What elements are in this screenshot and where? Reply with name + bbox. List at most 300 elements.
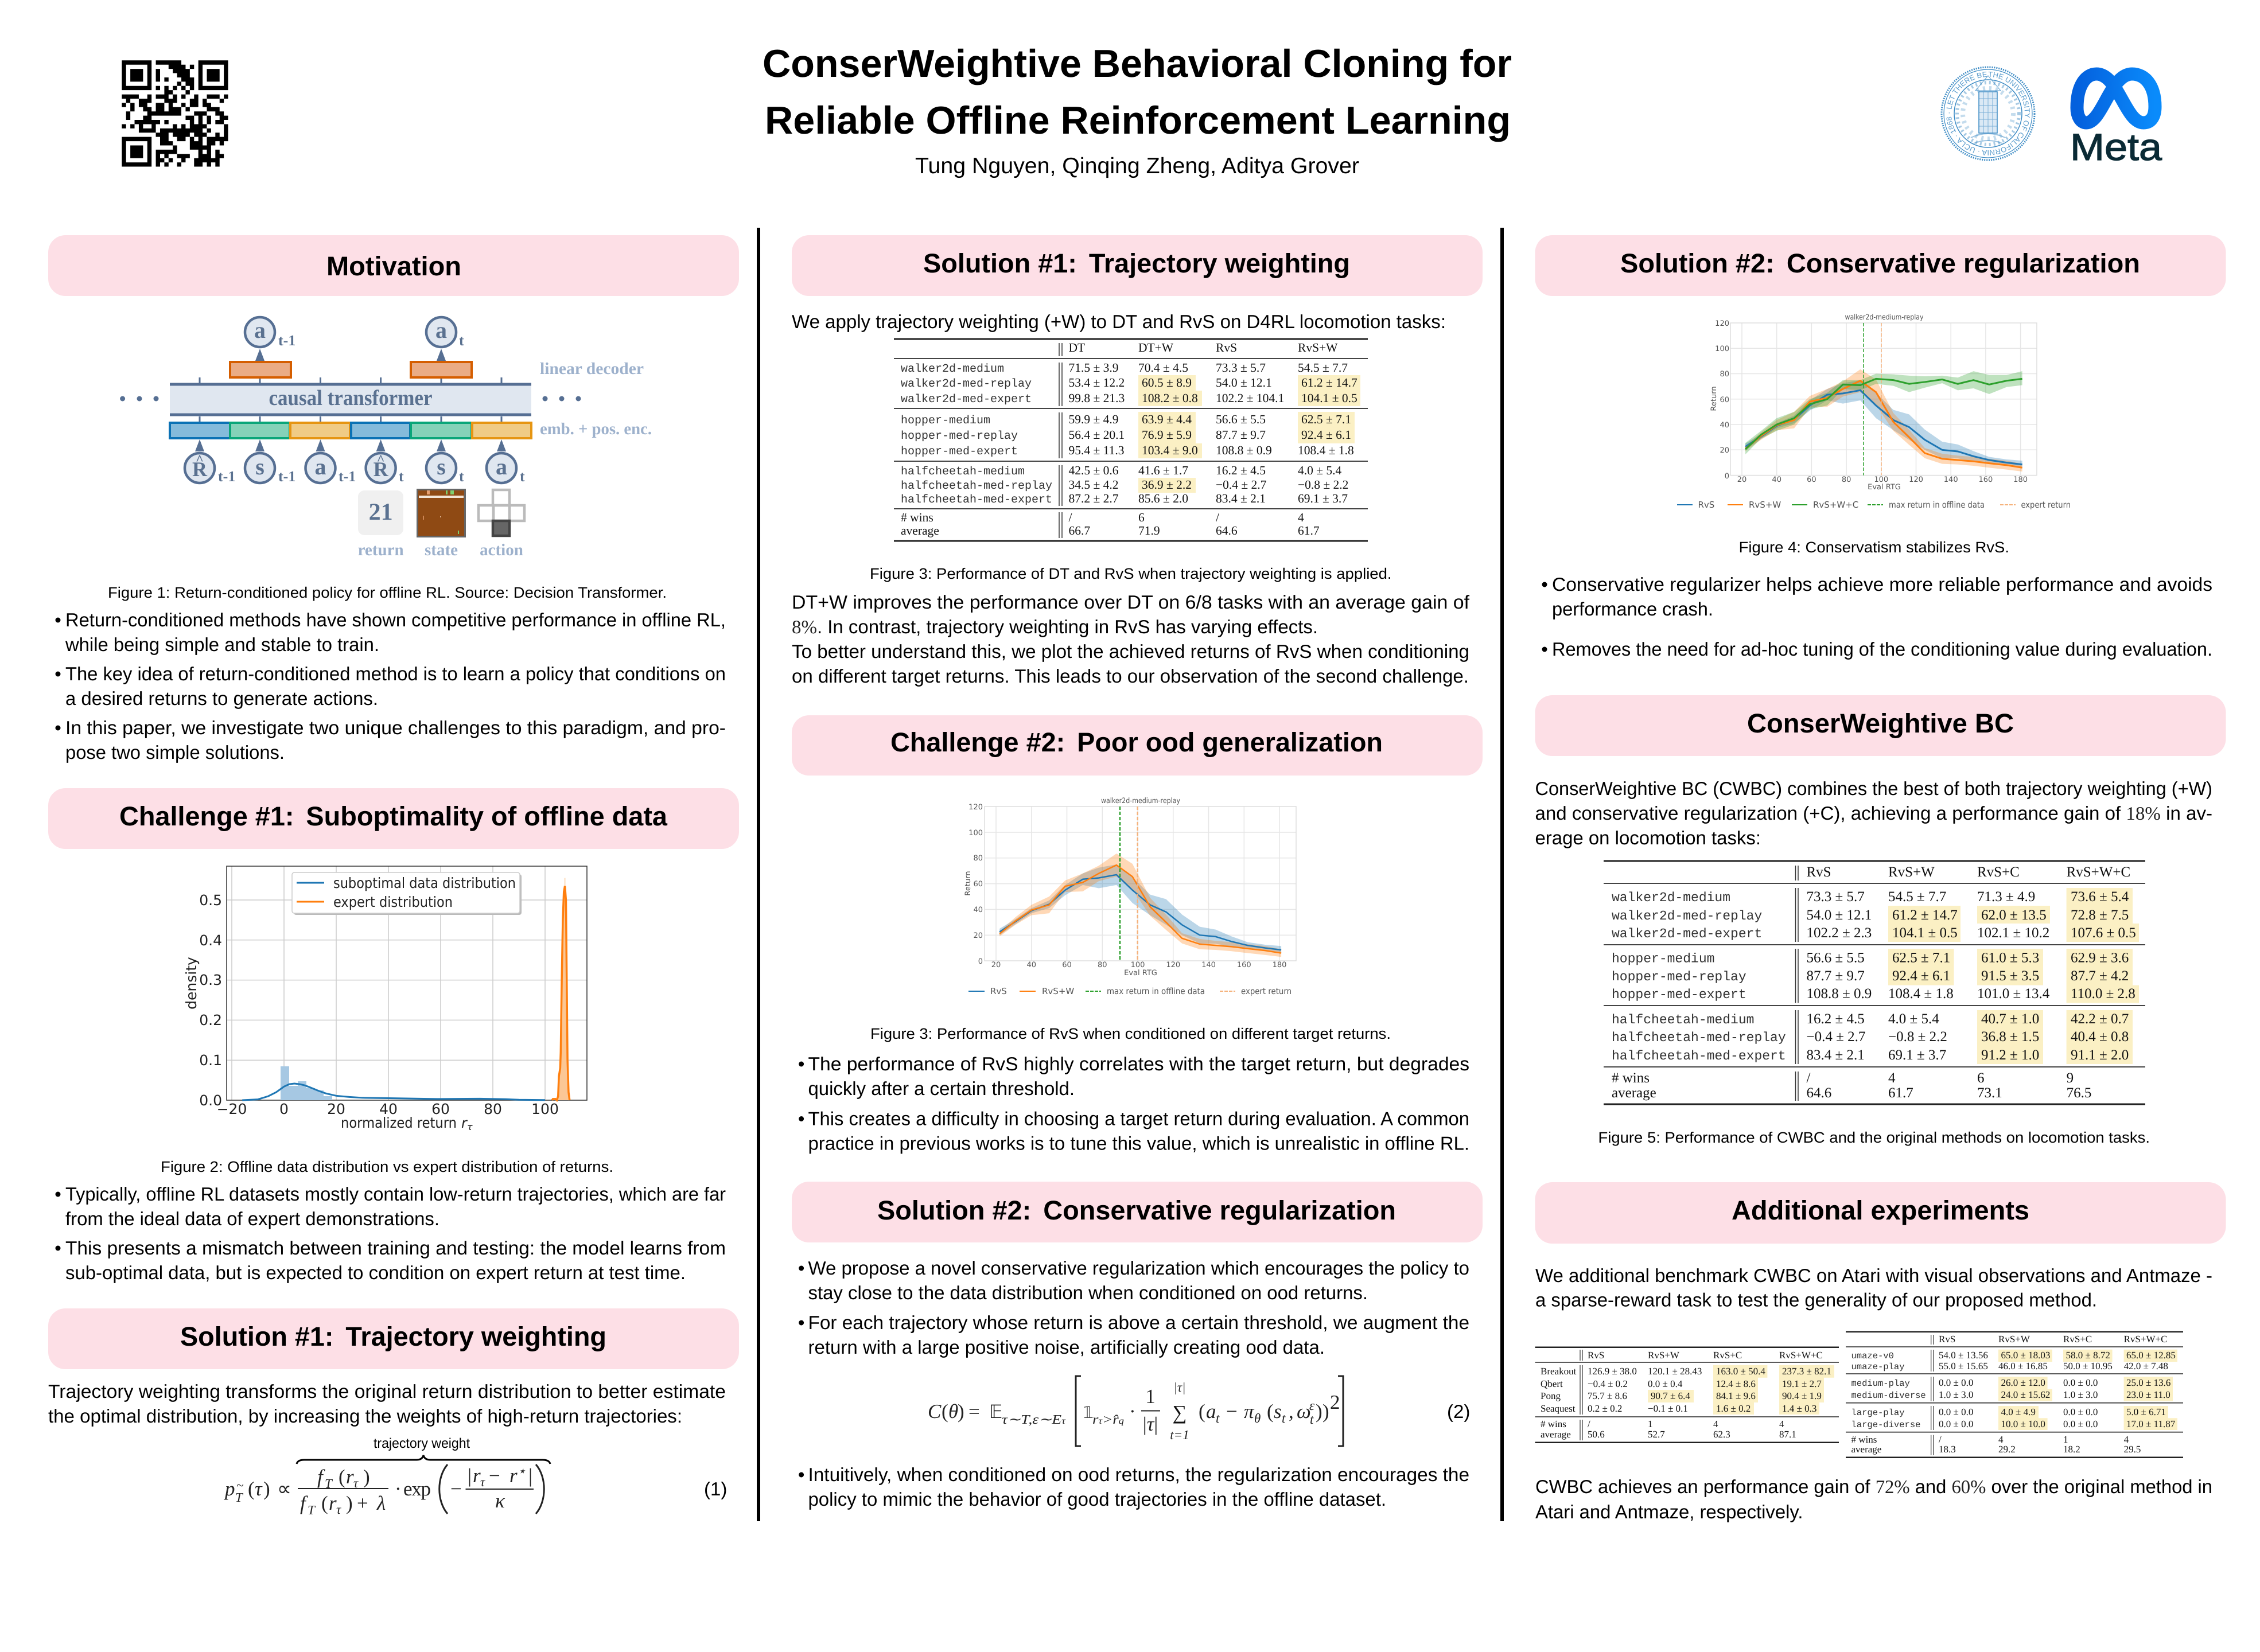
table: DT and RvS with weighting: / xyxy=(1216,511,1219,524)
equation 1: ~ xyxy=(236,1478,244,1493)
equation 2: θ xyxy=(948,1400,958,1423)
table: Atari results: 84.1 ± 9.6 xyxy=(1716,1390,1756,1401)
diagram: decision transformer architecture: a xyxy=(435,317,447,343)
table: DT and RvS with weighting: 59.9 ± 4.9 xyxy=(1068,412,1119,426)
table: Antmaze results: 26.0 ± 12.0 xyxy=(2001,1377,2045,1388)
table: DT and RvS with weighting: walker2d-med-replay xyxy=(901,377,1032,391)
bullet list: conservative regularizer: Conservative regularizer helps achieve more reliable performance and avoids xyxy=(1552,574,2212,595)
table: Atari results: 163.0 ± 50.4 xyxy=(1716,1366,1765,1377)
bullet list: challenge 1: Typically, offline RL datasets mostly contain low-return trajectories, which are far xyxy=(65,1183,726,1205)
text block: To better understand this, we plot the achieved returns of RvS when conditioning xyxy=(792,641,1469,662)
equation number 2: (2) xyxy=(1447,1401,1470,1422)
equation 1: T xyxy=(235,1490,244,1505)
heading: Solution 1 xyxy=(792,235,1483,296)
diagram: decision transformer architecture: return xyxy=(358,541,404,559)
axis labels: 0.4 xyxy=(199,932,222,949)
table: CWBC locomotion: walker2d-med-replay xyxy=(1612,909,1762,924)
bullet list: motivation: a desired returns to generate actions. xyxy=(65,688,378,709)
bullet list: challenge 1: This presents a mismatch between training and testing: the model learns from xyxy=(65,1237,726,1259)
table: DT and RvS with weighting: walker2d-medium xyxy=(901,363,1004,376)
table: Atari results: Seaquest xyxy=(1541,1403,1576,1414)
diagram: decision transformer architecture: linear decoder xyxy=(540,360,644,378)
diagram: decision transformer architecture: causal transformer xyxy=(269,386,433,410)
table: Antmaze results: 0.0 ± 0.0 xyxy=(1939,1377,1973,1388)
table: Antmaze results: 18.2 xyxy=(2063,1444,2080,1455)
bullet list: solution 2 xyxy=(799,1257,1469,1358)
table: CWBC locomotion: 62.5 ± 7.1 xyxy=(1892,950,1950,966)
equation 1: ( xyxy=(339,1466,345,1488)
return icon xyxy=(358,490,403,535)
density chart xyxy=(183,866,587,1132)
table: DT and RvS with weighting: 104.1 ± 0.5 xyxy=(1301,391,1357,405)
legend: RvS xyxy=(1698,500,1714,510)
table: Antmaze results: RvS+W xyxy=(1998,1334,2031,1345)
table: CWBC locomotion: −0.4 ± 2.7 xyxy=(1806,1029,1865,1045)
equation 1: exp xyxy=(403,1478,431,1500)
text block xyxy=(792,591,1470,687)
panel: solution 2 right xyxy=(1535,235,2226,660)
table: CWBC locomotion: 42.2 ± 0.7 xyxy=(2071,1011,2129,1027)
table: CWBC locomotion: 61.2 ± 14.7 xyxy=(1892,907,1958,923)
heading: ConserWeightive BC: ConserWeightive BC xyxy=(1747,708,2014,738)
table: CWBC locomotion: 76.5 xyxy=(2067,1085,2091,1101)
text block: conclusion: Atari and Antmaze, respectively. xyxy=(1535,1501,1803,1522)
panel: solution 1 center xyxy=(792,235,1483,687)
table: CWBC locomotion: 83.4 ± 2.1 xyxy=(1806,1047,1865,1063)
text block: on different target returns. This leads to our observation of the second challenge. xyxy=(792,665,1469,687)
table: DT and RvS with weighting xyxy=(894,339,1368,541)
bullet list: challenge 2: The performance of RvS highly correlates with the target return, but degrades xyxy=(808,1053,1469,1074)
table: Atari results: 0.2 ± 0.2 xyxy=(1588,1403,1622,1414)
table: Atari results: 87.1 xyxy=(1779,1429,1796,1440)
return icon: 21 xyxy=(369,499,393,525)
table: Antmaze results: umaze-v0 xyxy=(1851,1351,1894,1361)
table: Antmaze results: 0.0 ± 0.0 xyxy=(1939,1419,1973,1429)
equation 2: s xyxy=(1274,1400,1282,1423)
table: CWBC locomotion: halfcheetah-med-replay xyxy=(1612,1030,1786,1045)
equation 2: ) xyxy=(958,1400,964,1423)
equation 2: τ∼T,ε∼E τ xyxy=(1002,1412,1067,1427)
table: CWBC locomotion: 73.3 ± 5.7 xyxy=(1806,889,1865,905)
equation 2: ( xyxy=(942,1400,948,1423)
table: Antmaze results: umaze-play xyxy=(1851,1362,1905,1372)
table: DT and RvS with weighting: 6 xyxy=(1138,511,1145,524)
equation 1: ( xyxy=(321,1492,328,1514)
table: Atari results: RvS+W xyxy=(1648,1350,1680,1361)
table: Atari results: RvS+C xyxy=(1713,1350,1742,1361)
table: DT and RvS with weighting: 54.0 ± 12.1 xyxy=(1216,376,1272,389)
equation 1: λ xyxy=(376,1492,386,1514)
divider: left xyxy=(757,228,760,1521)
equation 1: ) xyxy=(363,1466,370,1488)
table: DT and RvS with weighting: 99.8 ± 21.3 xyxy=(1068,391,1125,405)
equation 1: ⋆ xyxy=(518,1464,526,1478)
table: Antmaze results: 65.0 ± 18.03 xyxy=(2001,1350,2050,1361)
text block: conclusion: CWBC achieves an performance gain of 72% and 60% over the original method in xyxy=(1535,1476,2212,1498)
table: CWBC locomotion: 61.0 ± 5.3 xyxy=(1981,950,2039,966)
table: Atari results: 62.3 xyxy=(1713,1429,1730,1440)
text block: 8%. In contrast, trajectory weighting in RvS has varying effects. xyxy=(792,616,1318,638)
table: Antmaze results: 4 xyxy=(1998,1434,2004,1445)
table: Antmaze results: 1.0 ± 3.0 xyxy=(2063,1389,2098,1400)
table: Atari results: 90.4 ± 1.9 xyxy=(1782,1390,1822,1401)
line chart: RvS and RvS+W: 120 xyxy=(968,803,983,812)
table: Atari results: RvS+W+C xyxy=(1779,1350,1823,1361)
table: DT and RvS with weighting: 108.4 ± 1.8 xyxy=(1298,443,1354,457)
line chart: RvS, RvS+W and RvS+W+C: 80 xyxy=(1842,476,1851,484)
table: Atari results: 50.6 xyxy=(1588,1429,1605,1440)
equation 2: ω xyxy=(1297,1400,1311,1423)
table: Antmaze results: 0.0 ± 0.0 xyxy=(2063,1377,2098,1388)
diagram: decision transformer architecture: emb. + pos. enc. xyxy=(540,420,652,438)
table: DT and RvS with weighting: 73.3 ± 5.7 xyxy=(1216,361,1266,375)
table: DT and RvS with weighting: walker2d-med-expert xyxy=(901,393,1032,406)
table: Antmaze results: 5.0 ± 6.71 xyxy=(2126,1406,2166,1417)
heading: Additional experiments xyxy=(1535,1182,2226,1244)
expert density fill xyxy=(242,878,570,1100)
embedding blocks xyxy=(170,423,531,438)
diagram: decision transformer architecture: a xyxy=(254,317,266,343)
legend: RvS xyxy=(990,986,1007,996)
equation 2: t xyxy=(1216,1411,1220,1425)
equation 2: a xyxy=(1206,1400,1216,1423)
intro text: We apply trajectory weighting (+W) to DT and RvS on D4RL locomotion tasks: xyxy=(792,311,1446,332)
equation 2: t=1 xyxy=(1170,1428,1189,1442)
axis labels: 0.2 xyxy=(199,1012,222,1028)
text block: We additional benchmark CWBC on Atari with visual observations and Antmaze - xyxy=(1535,1265,2212,1286)
table: Antmaze results: 58.0 ± 8.72 xyxy=(2065,1350,2110,1361)
density chart: 80 xyxy=(484,1101,502,1117)
equation 1: r xyxy=(329,1492,337,1514)
heading: Challenge 1: Challenge #1: Suboptimality of offline data xyxy=(119,801,668,831)
table: Antmaze results: 0.0 ± 0.0 xyxy=(1939,1406,1973,1417)
linear decoder blocks xyxy=(230,362,472,377)
table: Antmaze results: RvS+W+C xyxy=(2124,1334,2167,1345)
diagram: decision transformer architecture: ^ xyxy=(196,453,204,467)
table: CWBC locomotion: halfcheetah-medium xyxy=(1612,1012,1754,1027)
line chart: RvS, RvS+W and RvS+W+C: 80 xyxy=(1720,370,1729,379)
table: Antmaze results: 18.3 xyxy=(1939,1444,1956,1455)
table: DT and RvS with weighting: 42.5 ± 0.6 xyxy=(1068,463,1119,477)
diagram: decision transformer architecture: state xyxy=(425,541,458,559)
heading: Solution 2: Solution #2: Conservative regularization xyxy=(1620,248,2140,278)
line chart: RvS and RvS+W xyxy=(964,797,1296,996)
table: DT and RvS with weighting: hopper-med-replay xyxy=(901,430,1018,443)
table: CWBC locomotion: 87.7 ± 9.7 xyxy=(1806,968,1865,984)
equation 1: τ xyxy=(480,1475,485,1489)
table: Antmaze results: 1.0 ± 3.0 xyxy=(1939,1389,1973,1400)
table: Antmaze results: 29.2 xyxy=(1998,1444,2016,1455)
table: DT and RvS with weighting: 85.6 ± 2.0 xyxy=(1138,492,1188,505)
table: CWBC locomotion: 6 xyxy=(1977,1070,1984,1086)
table: CWBC locomotion: 40.4 ± 0.8 xyxy=(2071,1029,2129,1045)
equation 2: 1 xyxy=(1145,1385,1156,1408)
equation 1: p xyxy=(223,1478,235,1500)
line chart: RvS and RvS+W: 80 xyxy=(1098,961,1107,969)
heading: Challenge 2: Challenge #2: Poor ood generalization xyxy=(890,727,1383,757)
table: DT and RvS with weighting: 60.5 ± 8.9 xyxy=(1142,376,1192,389)
bullet: intuition xyxy=(799,1464,1469,1510)
text block: Trajectory weighting transforms the original return distribution to better estimate xyxy=(48,1381,726,1402)
diagram: decision transformer architecture: s xyxy=(255,454,264,480)
line chart: RvS, RvS+W and RvS+W+C: 100 xyxy=(1874,476,1888,484)
action icon xyxy=(479,490,524,536)
table: Atari results: 126.9 ± 38.0 xyxy=(1588,1366,1637,1377)
table: CWBC locomotion: 73.6 ± 5.4 xyxy=(2071,889,2129,905)
table: CWBC locomotion: RvS xyxy=(1806,864,1831,880)
table: Atari results: Qbert xyxy=(1541,1378,1563,1389)
authors: Tung Nguyen, Qinqing Zheng, Aditya Grover xyxy=(915,154,1359,178)
table: DT and RvS with weighting: 71.5 ± 3.9 xyxy=(1068,361,1119,375)
state icon xyxy=(418,490,465,537)
table: Atari results: Breakout xyxy=(1541,1366,1577,1377)
table: CWBC locomotion: 4 xyxy=(1888,1070,1896,1086)
table: Atari results: 19.1 ± 2.7 xyxy=(1782,1378,1822,1389)
table: Antmaze results: 24.0 ± 15.62 xyxy=(2001,1389,2050,1400)
line chart: RvS, RvS+W and RvS+W+C: 20 xyxy=(1720,446,1729,455)
density chart: r xyxy=(461,1115,468,1131)
table: Antmaze results xyxy=(1846,1332,2183,1458)
table: CWBC locomotion: 91.1 ± 2.0 xyxy=(2071,1047,2129,1063)
table: DT and RvS with weighting: 87.2 ± 2.7 xyxy=(1068,492,1119,505)
table: CWBC locomotion: 71.3 ± 4.9 xyxy=(1977,889,2035,905)
equation 2: t xyxy=(1282,1411,1286,1425)
line chart: RvS and RvS+W: 20 xyxy=(991,961,1001,969)
text block xyxy=(48,1381,726,1427)
table: CWBC locomotion: RvS+W+C xyxy=(2067,864,2130,880)
table: Antmaze results: 4.0 ± 4.9 xyxy=(2001,1406,2036,1417)
table: Antmaze results: 42.0 ± 7.48 xyxy=(2124,1361,2168,1372)
table: DT and RvS with weighting: # wins xyxy=(901,511,933,524)
line chart: RvS, RvS+W and RvS+W+C: 100 xyxy=(1715,345,1729,353)
title: ConserWeightive Behavioral Cloning for xyxy=(763,42,1512,85)
bullet list: challenge 2: This creates a difficulty in choosing a target return during evaluation. A common xyxy=(808,1108,1469,1129)
line chart: RvS and RvS+W: 40 xyxy=(1027,961,1036,969)
token circles xyxy=(185,317,516,483)
density chart: −20 xyxy=(217,1101,247,1117)
table: Atari results: 12.4 ± 8.6 xyxy=(1716,1378,1756,1389)
table: CWBC locomotion: RvS+W xyxy=(1888,864,1935,880)
line chart: RvS and RvS+W: 60 xyxy=(1062,961,1072,969)
table: Atari results: −0.1 ± 0.1 xyxy=(1648,1403,1688,1414)
table: CWBC locomotion: −0.8 ± 2.2 xyxy=(1888,1029,1947,1045)
equation 2: ( xyxy=(1199,1400,1205,1423)
table: CWBC locomotion: 64.6 xyxy=(1806,1085,1831,1101)
heading: Solution 2 xyxy=(1535,235,2226,296)
equation number 1: (1) xyxy=(704,1478,727,1499)
equation 2: ε xyxy=(1309,1398,1315,1413)
table: DT and RvS with weighting: 83.4 ± 2.1 xyxy=(1216,492,1266,505)
text block xyxy=(1535,778,2212,848)
highlights xyxy=(1648,1365,1834,1415)
table: Atari results: 1 xyxy=(1648,1419,1652,1429)
table: Atari results: / xyxy=(1588,1419,1590,1429)
density chart: τ xyxy=(467,1121,473,1132)
KDE line: expert xyxy=(552,886,570,1100)
bullet list: challenge 1 xyxy=(55,1183,726,1283)
diagram: decision transformer architecture xyxy=(120,317,652,559)
table: CWBC locomotion: 92.4 ± 6.1 xyxy=(1892,968,1950,984)
KDE line: suboptimal xyxy=(242,1084,545,1100)
table: CWBC locomotion: halfcheetah-med-expert xyxy=(1612,1049,1786,1063)
table: CWBC locomotion: 110.0 ± 2.8 xyxy=(2071,986,2135,1002)
equation 2: t xyxy=(1310,1412,1314,1427)
bullet: intuition: policy to mimic the behavior of good trajectories in the offline dataset. xyxy=(808,1489,1386,1510)
table: CWBC locomotion: hopper-med-expert xyxy=(1612,987,1746,1002)
bullet list: solution 2: For each trajectory whose return is above a certain threshold, we augment the xyxy=(808,1312,1469,1333)
table: Antmaze results: 50.0 ± 10.95 xyxy=(2063,1361,2113,1372)
line chart: RvS, RvS+W and RvS+W+C: 0 xyxy=(1725,472,1729,481)
table: DT and RvS with weighting: halfcheetah-medium xyxy=(901,465,1025,478)
equation 2: ) xyxy=(1322,1400,1329,1423)
density chart: 0 xyxy=(279,1101,289,1117)
table: CWBC locomotion: 108.4 ± 1.8 xyxy=(1888,986,1954,1002)
diagram: decision transformer architecture: t xyxy=(459,468,464,485)
heading: Additional experiments: Additional experiments xyxy=(1732,1195,2029,1225)
table: Atari results: 237.3 ± 82.1 xyxy=(1782,1366,1831,1377)
heading: Motivation xyxy=(48,235,739,296)
equation 1: | xyxy=(468,1464,472,1487)
table: CWBC locomotion xyxy=(1604,861,2145,1104)
table: Antmaze results: 25.0 ± 13.6 xyxy=(2126,1377,2170,1388)
table: Atari results xyxy=(1535,1347,1839,1443)
equation 1: τ xyxy=(255,1478,263,1500)
table: Atari results: 52.7 xyxy=(1648,1429,1665,1440)
legend xyxy=(968,986,1292,996)
diagram: decision transformer architecture: t xyxy=(399,468,404,485)
table: Antmaze results: 0.0 ± 0.0 xyxy=(2063,1419,2098,1429)
equation 2: − xyxy=(1226,1400,1238,1423)
equation 1: T xyxy=(325,1476,333,1491)
equation 2: θ xyxy=(1254,1411,1261,1425)
text block: a sparse-reward task to test the generality of our proposed method. xyxy=(1535,1289,2097,1310)
table: Atari results: 1.4 ± 0.3 xyxy=(1782,1403,1816,1414)
diagram: decision transformer architecture: action xyxy=(480,541,523,559)
heading: Challenge 2 xyxy=(792,715,1483,776)
table: DT and RvS with weighting: 102.2 ± 104.1 xyxy=(1216,391,1284,405)
table: CWBC locomotion: average xyxy=(1612,1085,1656,1101)
table: Antmaze results: 54.0 ± 13.56 xyxy=(1939,1350,1988,1361)
table: Atari results: Pong xyxy=(1541,1390,1561,1401)
table: CWBC locomotion: 107.6 ± 0.5 xyxy=(2071,925,2136,941)
equation 2: ∑ xyxy=(1173,1401,1187,1424)
legend: RvS+W+C xyxy=(1813,500,1858,510)
equation 1: r xyxy=(346,1466,354,1488)
table: DT and RvS with weighting: 108.2 ± 0.8 xyxy=(1142,391,1198,405)
heading: Solution 1 xyxy=(48,1308,739,1369)
diagram: decision transformer architecture: t-1 xyxy=(278,468,295,485)
table: CWBC locomotion: 16.2 ± 4.5 xyxy=(1806,1011,1865,1027)
equation 1: τ xyxy=(353,1476,359,1490)
line chart: RvS, RvS+W and RvS+W+C: 140 xyxy=(1944,476,1958,484)
line chart: RvS and RvS+W: Return xyxy=(964,871,973,896)
table: CWBC locomotion: 73.1 xyxy=(1977,1085,2002,1101)
axis labels: 0.5 xyxy=(199,892,222,909)
equation 2 xyxy=(928,1376,1343,1446)
diagram: decision transformer architecture: t-1 xyxy=(278,332,295,349)
bullet list: motivation: In this paper, we investigate two unique challenges to this paradigm, and pro- xyxy=(65,717,726,738)
line chart: RvS and RvS+W: 40 xyxy=(973,906,983,914)
equation 1: T xyxy=(308,1503,316,1517)
equation 1: ∝ xyxy=(277,1478,291,1500)
table: DT and RvS with weighting: 34.5 ± 4.2 xyxy=(1068,478,1119,492)
caption: figure 3 plot: Figure 3: Performance of RvS when conditioned on different target returns. xyxy=(870,1025,1391,1042)
legend: expert return xyxy=(2021,500,2071,510)
line chart: RvS and RvS+W: Eval RTG xyxy=(1124,969,1157,977)
table: DT and RvS with weighting: 41.6 ± 1.7 xyxy=(1138,463,1188,477)
line chart: RvS, RvS+W and RvS+W+C: 40 xyxy=(1772,476,1781,484)
line chart: RvS, RvS+W and RvS+W+C: 180 xyxy=(2013,476,2028,484)
icon: UCLA seal xyxy=(1940,67,2036,161)
highlights xyxy=(1998,1350,2177,1430)
table: Atari results: 90.7 ± 6.4 xyxy=(1651,1390,1690,1401)
diagram: decision transformer architecture: t xyxy=(459,332,464,349)
line chart: RvS, RvS+W and RvS+W+C: Return xyxy=(1710,386,1718,411)
table: CWBC locomotion: 104.1 ± 0.5 xyxy=(1892,925,1958,941)
text block: ConserWeightive BC (CWBC) combines the best of both trajectory weighting (+W) xyxy=(1535,778,2212,799)
caption: figure 1: Figure 1: Return-conditioned policy for offline RL. Source: Decision Transformer. xyxy=(108,584,667,601)
table: CWBC locomotion: RvS+C xyxy=(1977,864,2020,880)
density chart: 60 xyxy=(431,1101,450,1117)
table: CWBC locomotion: 108.8 ± 0.9 xyxy=(1806,986,1872,1002)
equation 1: f xyxy=(317,1466,325,1488)
line chart: RvS, RvS+W and RvS+W+C: 120 xyxy=(1715,320,1729,328)
diagram: decision transformer architecture: t xyxy=(520,468,525,485)
table: CWBC locomotion: 87.7 ± 4.2 xyxy=(2071,968,2129,984)
table: Antmaze results: / xyxy=(1939,1434,1942,1445)
table: CWBC locomotion: 69.1 ± 3.7 xyxy=(1888,1047,1946,1063)
table: DT and RvS with weighting: 36.9 ± 2.2 xyxy=(1142,478,1192,492)
table: Antmaze results: average xyxy=(1851,1444,1881,1455)
line chart: RvS, RvS+W and RvS+W+C: 40 xyxy=(1720,421,1729,430)
heading: Challenge 1 xyxy=(48,788,739,849)
table: Antmaze results: large-diverse xyxy=(1851,1420,1920,1430)
table: Atari results: 0.0 ± 0.4 xyxy=(1648,1378,1683,1389)
histogram bars xyxy=(281,1066,332,1100)
bullet list: challenge 1: from the ideal data of expert demonstrations. xyxy=(65,1208,439,1229)
bullet list: challenge 2: quickly after a certain threshold. xyxy=(808,1078,1075,1099)
table: CWBC locomotion: 36.8 ± 1.5 xyxy=(1981,1029,2039,1045)
panel: challenge 1 xyxy=(48,788,739,1283)
table: CWBC locomotion: 91.2 ± 1.0 xyxy=(1981,1047,2039,1063)
table: DT and RvS with weighting: 103.4 ± 9.0 xyxy=(1142,443,1198,457)
caption: figure 5: Figure 5: Performance of CWBC and the original methods on locomotion tasks. xyxy=(1598,1129,2150,1146)
equation 1: τ xyxy=(336,1502,341,1517)
table: CWBC locomotion: 62.9 ± 3.6 xyxy=(2071,950,2129,966)
panel: ConserWeightive BC xyxy=(1535,695,2226,1146)
line chart: RvS, RvS+W and RvS+W+C: 120 xyxy=(1909,476,1923,484)
diagram: decision transformer architecture: R xyxy=(192,458,208,481)
legend: max return in offline data xyxy=(1889,500,1985,510)
table: DT and RvS with weighting: 61.7 xyxy=(1298,524,1320,537)
table: Atari results: 4 xyxy=(1779,1419,1784,1429)
text block: erage on locomotion tasks: xyxy=(1535,827,1761,848)
table: CWBC locomotion: 40.7 ± 1.0 xyxy=(1981,1011,2039,1027)
table: DT and RvS with weighting: average xyxy=(901,524,939,537)
table: DT and RvS with weighting: RvS+W xyxy=(1298,341,1338,354)
bullet list: challenge 1: sub-optimal data, but is expected to condition on expert return at test time. xyxy=(65,1262,686,1283)
text block: the optimal distribution, by increasing the weights of high-return trajectories: xyxy=(48,1405,682,1427)
density chart: 100 xyxy=(531,1101,559,1117)
table: Antmaze results: 55.0 ± 15.65 xyxy=(1939,1361,1988,1372)
heading: ConserWeightive BC xyxy=(1535,695,2226,756)
table: CWBC locomotion: 9 xyxy=(2067,1070,2074,1086)
bullet list: motivation: The key idea of return-conditioned method is to learn a policy that conditions on xyxy=(65,663,726,684)
text block: DT+W improves the performance over DT on 6/8 tasks with an average gain of xyxy=(792,591,1470,613)
density chart: normalized return xyxy=(341,1115,457,1131)
table: DT and RvS with weighting: 56.6 ± 5.5 xyxy=(1216,412,1266,426)
equation 1: ( xyxy=(248,1478,255,1500)
